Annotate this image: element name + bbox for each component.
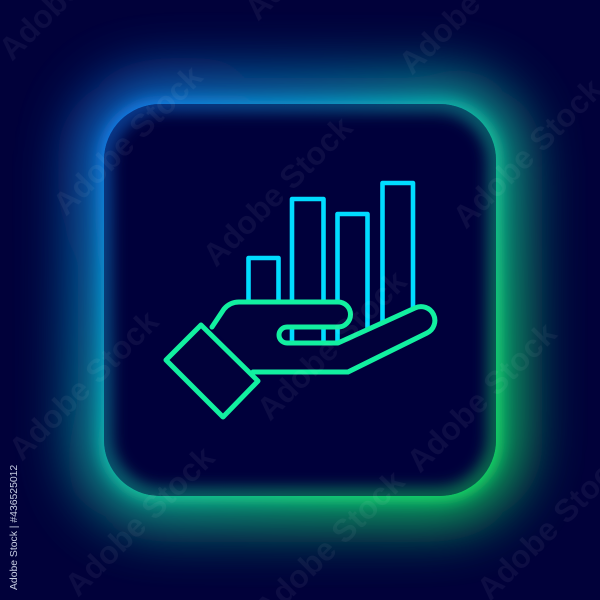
bar 2	[292, 199, 324, 343]
hand outline	[212, 302, 435, 372]
bar chart	[248, 183, 413, 343]
hand fill	[212, 302, 435, 372]
bar 4	[382, 183, 413, 325]
watermark: Adobe Stock repeated: Adobe Stock	[249, 263, 413, 427]
icon: open hand	[166, 302, 435, 417]
bar 1	[248, 258, 278, 304]
watermark: Adobe Stock repeated: Adobe Stock	[399, 315, 563, 479]
watermark: Adobe Stock repeated: Adobe Stock	[195, 109, 359, 273]
stock ID caption: Adobe Stock | #436525012	[9, 465, 20, 590]
watermark: Adobe Stock repeated: Adobe Stock	[45, 58, 209, 222]
bar 3	[338, 214, 368, 343]
watermark: Adobe Stock repeated: Adobe Stock	[57, 439, 221, 600]
dark rounded square panel	[104, 104, 496, 496]
cuff	[166, 325, 258, 417]
watermark: Adobe Stock repeated: Adobe Stock	[1, 303, 165, 467]
outer neon glow	[78, 78, 522, 522]
